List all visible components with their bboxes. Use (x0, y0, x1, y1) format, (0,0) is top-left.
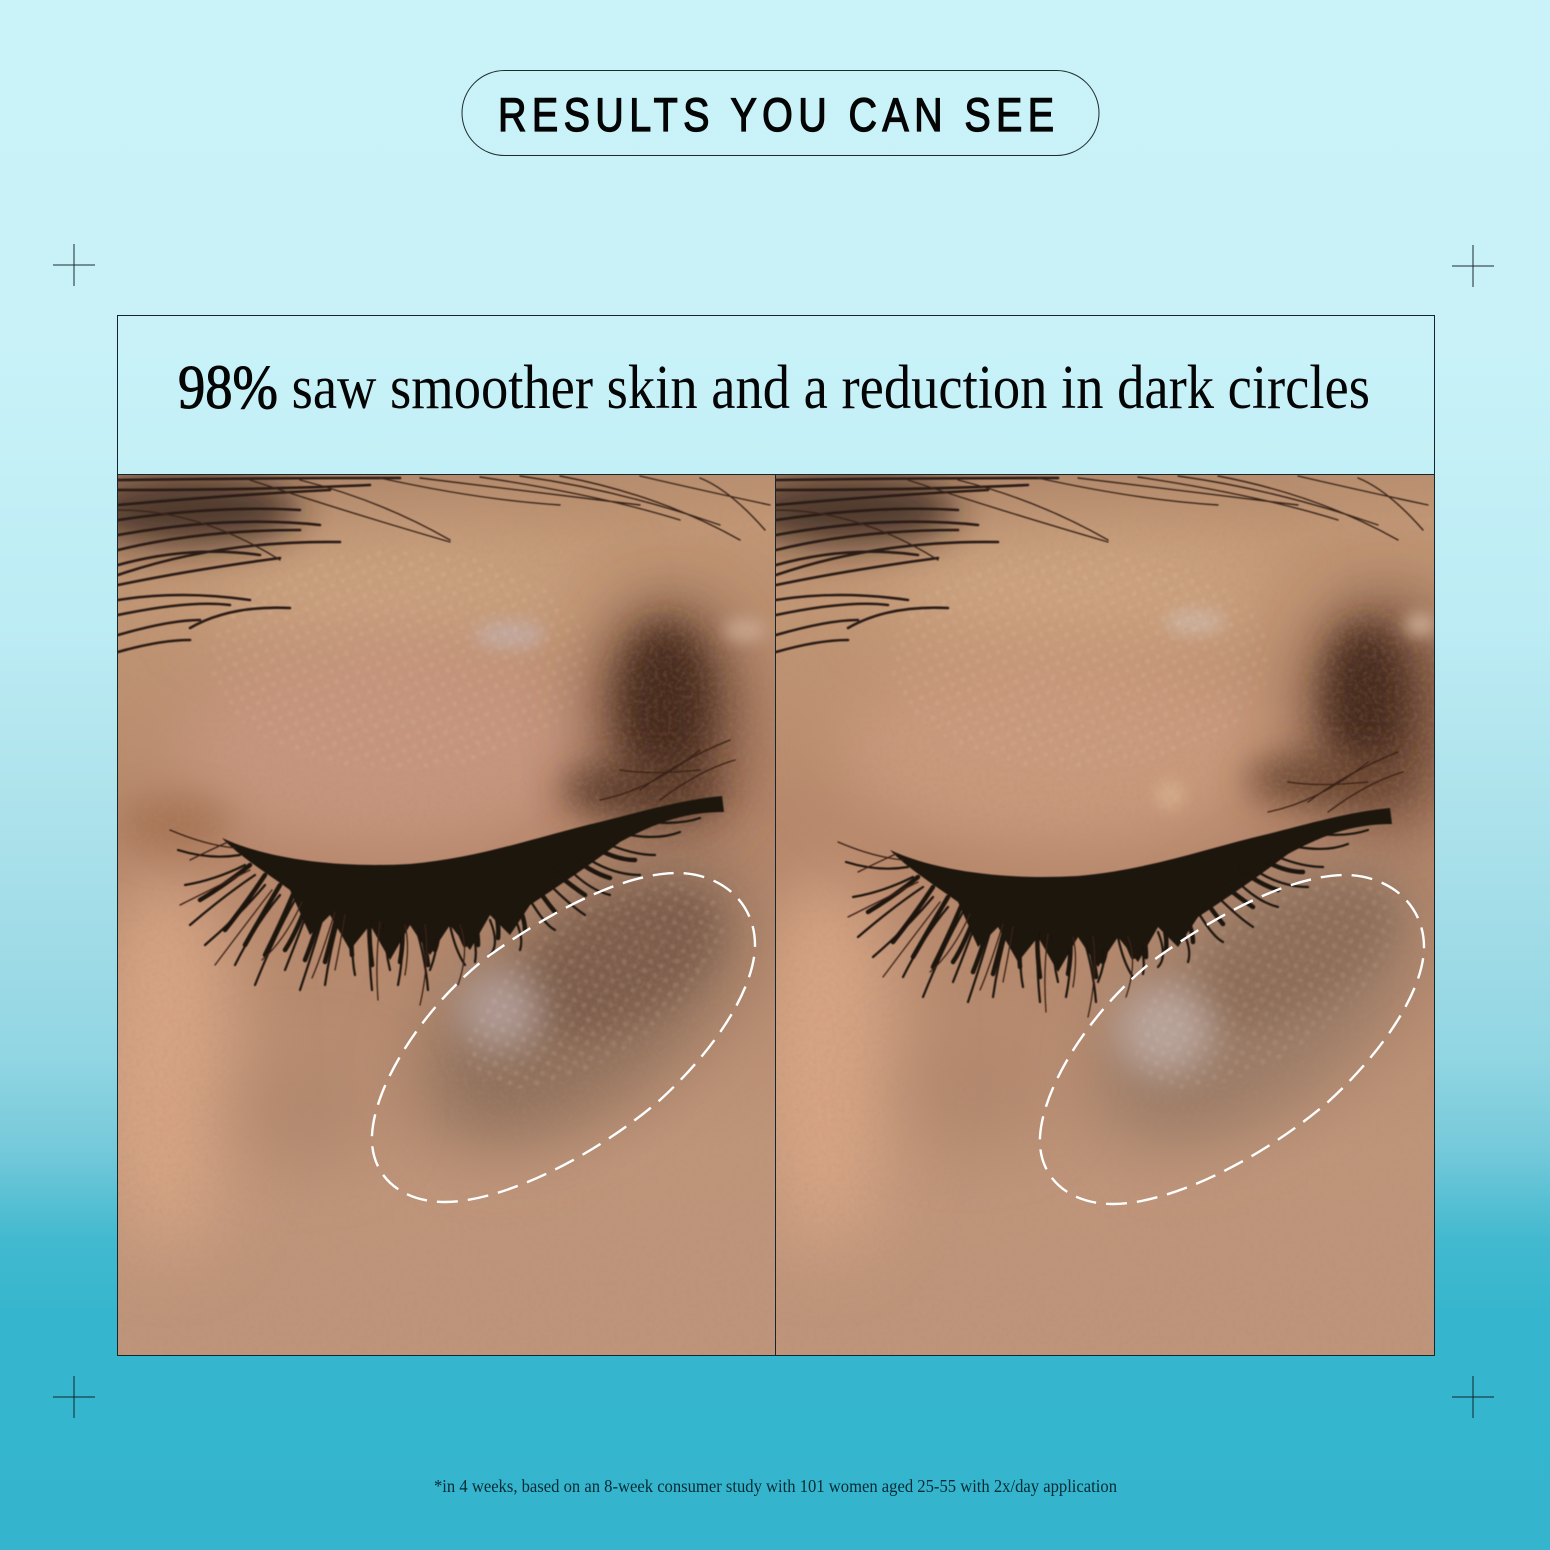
frame around headline and photos (118, 316, 1434, 1356)
dashed outline: under-eye area (1040, 875, 1424, 1204)
corner crosshair: bottom left (53, 1376, 95, 1418)
corner crosshair: top left (53, 244, 95, 286)
headline: 98% saw smoother skin and a reduction in dark circles (178, 354, 1370, 422)
dashed outline: under-eye area (372, 873, 755, 1202)
corner crosshair: top right (1452, 245, 1494, 287)
corner crosshair: bottom right (1452, 1376, 1494, 1418)
title pill (462, 70, 1099, 156)
title pill: RESULTS YOU CAN SEE (498, 90, 1054, 142)
before photo: left eye (80, 475, 796, 1355)
after photo: right eye (776, 475, 1434, 1355)
footnote: *in 4 weeks, based on an 8-week consumer study with 101 women aged 25-55 with 2x/day application (434, 1476, 1117, 1496)
